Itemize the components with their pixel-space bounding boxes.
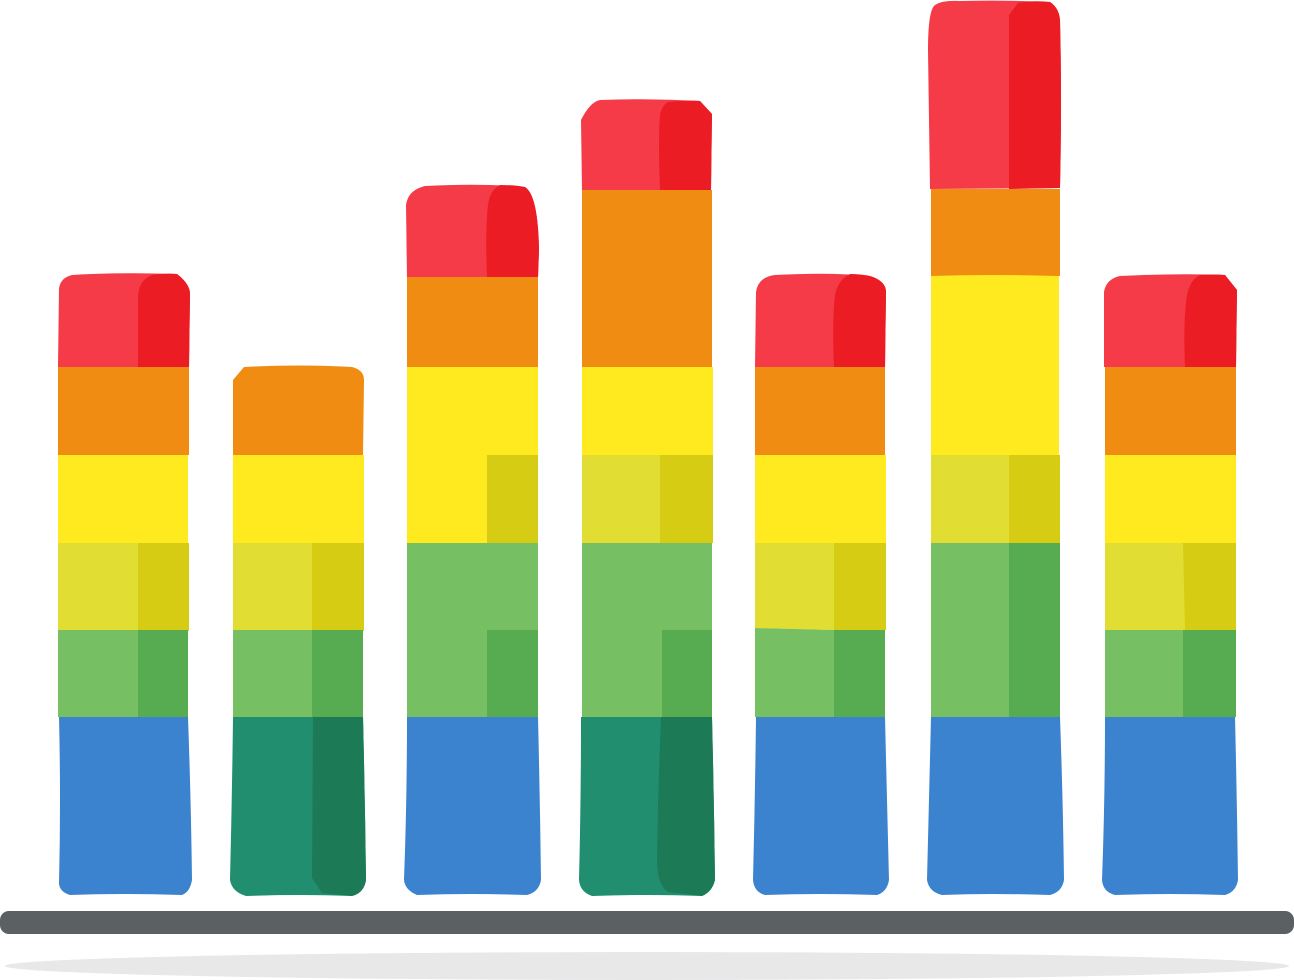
bar 2 (230, 366, 366, 896)
bar 3 (404, 185, 541, 895)
baseline (0, 911, 1294, 934)
bar 5 (753, 274, 889, 895)
bar 6 (927, 1, 1064, 895)
ground shadow (5, 952, 1289, 980)
bar 4 (579, 99, 715, 896)
bar 7 (1102, 274, 1238, 895)
bar 1 (58, 273, 192, 895)
